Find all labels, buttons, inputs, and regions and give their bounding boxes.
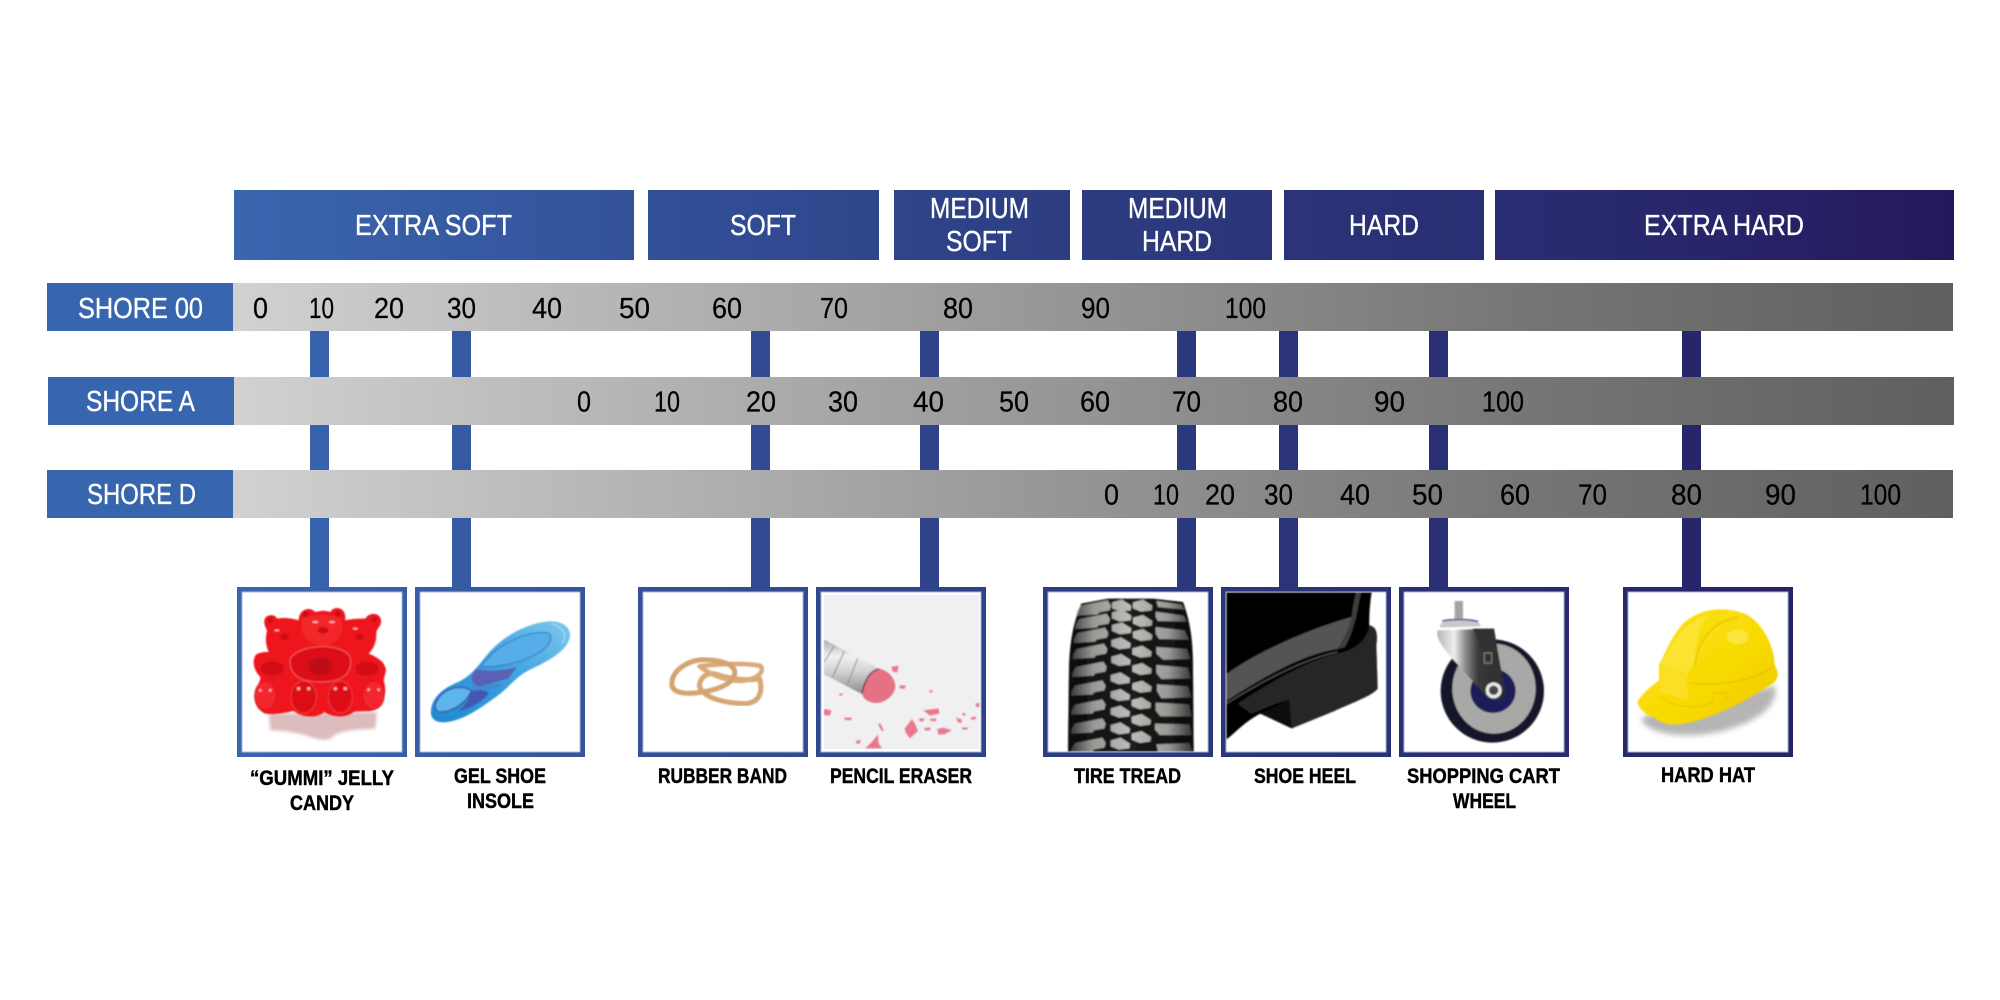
label: SHOPPING CART xyxy=(1407,765,1560,788)
scale row: Shore D: 60 xyxy=(1500,480,1530,512)
icon: hard hat xyxy=(1637,609,1778,735)
stems connecting scale to examples xyxy=(310,331,1701,590)
label xyxy=(1407,765,1560,813)
icon: insole xyxy=(431,621,570,722)
label: CANDY xyxy=(290,792,354,815)
scale row: Shore D: 40 xyxy=(1340,480,1370,512)
header: soft: SOFT xyxy=(730,210,796,242)
scale row: Shore D: 80 xyxy=(1671,480,1702,512)
scale row: Shore A: 90 xyxy=(1374,386,1405,418)
scale row: Shore 00: 40 xyxy=(532,293,562,325)
header: medium hard: MEDIUM xyxy=(1128,193,1227,225)
icon: pencil eraser xyxy=(824,595,979,749)
label: HARD HAT xyxy=(1661,764,1755,787)
header: medium hard: HARD xyxy=(1142,226,1212,258)
header: extra hard: EXTRA HARD xyxy=(1644,210,1804,242)
scale row: Shore D: SHORE D xyxy=(87,479,196,511)
label: RUBBER BAND xyxy=(658,765,787,788)
header: extra soft xyxy=(234,190,634,260)
header: extra hard xyxy=(1495,190,1954,260)
header: medium soft: SOFT xyxy=(946,226,1012,258)
icon: tire xyxy=(1068,599,1194,753)
header: medium soft xyxy=(894,190,1070,260)
label: TIRE TREAD xyxy=(1074,765,1181,788)
header: hard: HARD xyxy=(1349,210,1419,242)
example: gel shoe insole xyxy=(415,587,585,813)
scale row: Shore A: 20 xyxy=(746,386,776,418)
scale row: Shore 00: 10 xyxy=(309,293,334,325)
header: medium soft: MEDIUM xyxy=(930,193,1029,225)
header: extra soft: EXTRA SOFT xyxy=(355,210,512,242)
example: tire tread xyxy=(1043,587,1213,788)
scale row: Shore 00: 30 xyxy=(447,293,476,325)
scale row: Shore D: 100 xyxy=(1860,480,1901,512)
scale row: Shore D: 50 xyxy=(1412,480,1443,512)
label: INSOLE xyxy=(467,790,534,813)
icon: rubber bands xyxy=(672,660,762,704)
scale row: Shore 00: 60 xyxy=(712,293,742,325)
header: soft xyxy=(648,190,879,260)
scale row: Shore D xyxy=(47,470,1953,518)
scale row: Shore 00 xyxy=(47,283,1953,331)
label: GEL SHOE xyxy=(454,765,546,788)
scale row: Shore A: 50 xyxy=(999,386,1029,418)
scale row: Shore D: 20 xyxy=(1205,480,1235,512)
scale row: Shore D: 70 xyxy=(1578,480,1607,512)
label: PENCIL ERASER xyxy=(830,765,972,788)
scale row: Shore A xyxy=(48,377,1954,425)
scale row: Shore 00: 0 xyxy=(253,293,268,325)
label: “GUMMI” JELLY xyxy=(250,767,394,790)
scale row: Shore 00: 90 xyxy=(1081,293,1110,325)
scale row: Shore A: 10 xyxy=(654,386,680,418)
scale row: Shore A: 40 xyxy=(913,386,944,418)
label: WHEEL xyxy=(1453,790,1516,813)
label: SHOE HEEL xyxy=(1254,765,1356,788)
icon: caster wheel xyxy=(1437,601,1544,743)
scale row: Shore 00: 80 xyxy=(943,293,973,325)
scale row: Shore A: 30 xyxy=(828,386,858,418)
scale row: Shore D: 90 xyxy=(1765,480,1796,512)
scale row: Shore A: 60 xyxy=(1080,386,1110,418)
example: hard hat xyxy=(1623,587,1793,787)
scale row: Shore D: 10 xyxy=(1153,480,1179,512)
example: rubber band xyxy=(638,587,808,788)
example: shoe heel xyxy=(1221,587,1391,788)
scale row: Shore A: 70 xyxy=(1172,386,1201,418)
scale row: Shore D: 0 xyxy=(1104,480,1119,512)
scale row: Shore A: 100 xyxy=(1482,386,1524,418)
icon: gummy bears xyxy=(254,608,386,740)
example: shopping cart wheel xyxy=(1399,587,1569,813)
scale row: Shore A: SHORE A xyxy=(86,386,196,418)
header: medium hard xyxy=(1082,190,1272,260)
icon: shoe heel xyxy=(1226,592,1378,740)
scale row: Shore A: 80 xyxy=(1273,386,1303,418)
scale row: Shore 00: 20 xyxy=(374,293,404,325)
scale row: Shore 00: 50 xyxy=(619,293,650,325)
label xyxy=(250,767,394,815)
example: gummi jelly candy xyxy=(237,587,407,815)
header: hard xyxy=(1284,190,1484,260)
scale row: Shore 00: 100 xyxy=(1225,293,1266,325)
scale row: Shore 00: SHORE 00 xyxy=(78,293,203,325)
scale row: Shore A: 0 xyxy=(577,386,591,418)
scale row: Shore D: 30 xyxy=(1264,480,1293,512)
hardness category headers xyxy=(234,190,1954,260)
label xyxy=(454,765,546,813)
scale row: Shore 00: 70 xyxy=(820,293,848,325)
example: pencil eraser xyxy=(816,587,986,788)
